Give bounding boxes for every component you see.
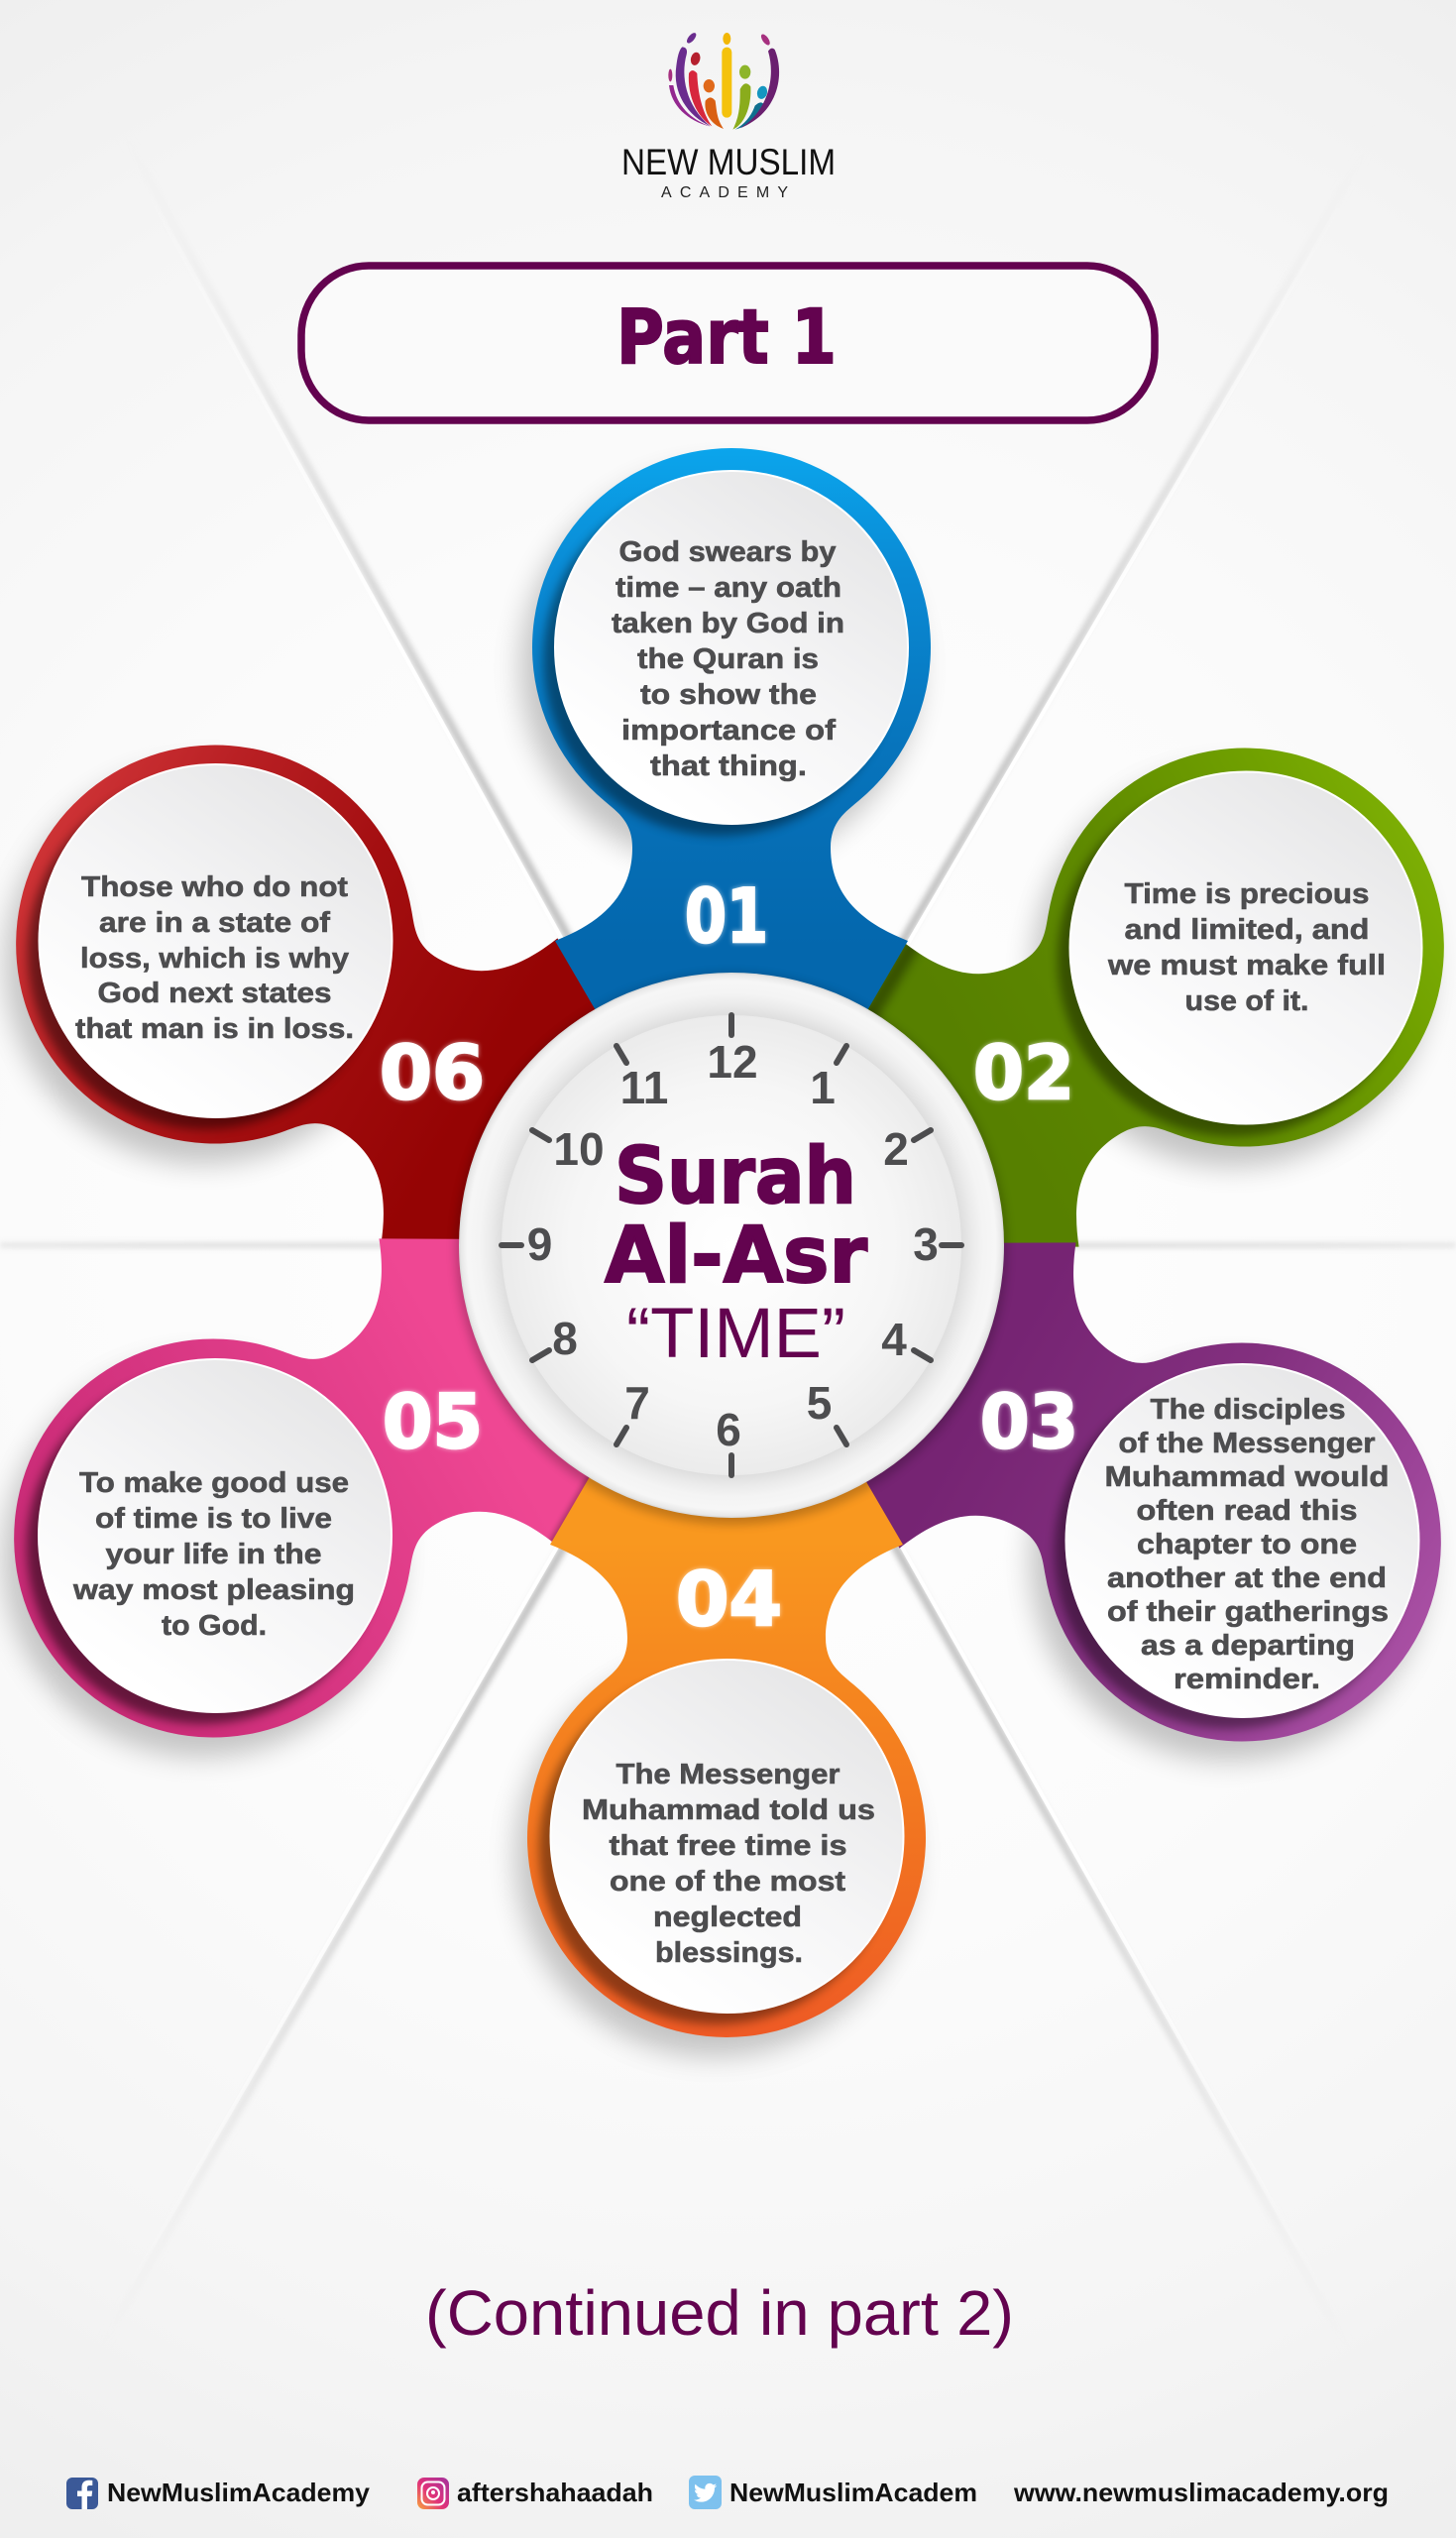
text 02: use of it. — [1185, 985, 1308, 1017]
text 02: Time is precious — [1124, 878, 1370, 910]
clock title: Al-Asr — [605, 1211, 868, 1301]
text 02: we must make full — [1107, 950, 1386, 981]
text 04: The Messenger — [616, 1759, 840, 1790]
icon: facebook — [66, 2478, 98, 2509]
text 03: Muhammad would — [1104, 1461, 1390, 1493]
clock numerals: 4 — [881, 1314, 907, 1365]
icon: twitter — [689, 2476, 722, 2509]
clock numerals: 10 — [553, 1123, 605, 1175]
number 05: 05 — [383, 1378, 483, 1465]
text 01: God swears by — [618, 536, 837, 568]
text 04: one of the most — [610, 1866, 845, 1898]
clock title: “TIME” — [626, 1295, 845, 1373]
text 06: loss, which is why — [80, 943, 349, 975]
number 02: 02 — [973, 1029, 1074, 1116]
text 01: importance of — [621, 715, 836, 747]
text 06: God next states — [97, 978, 331, 1009]
text 01: that thing. — [650, 750, 807, 782]
text 01 — [612, 536, 844, 782]
text 03: reminder. — [1174, 1664, 1320, 1695]
clock title — [605, 1132, 868, 1373]
clock ticks — [502, 1015, 961, 1475]
text 05 — [72, 1467, 355, 1642]
text 03: The disciples — [1150, 1394, 1346, 1426]
clock numerals — [527, 1036, 939, 1455]
text 06: that man is in loss. — [75, 1013, 354, 1045]
logo tagline: ACADEMY — [661, 184, 788, 201]
clock rim — [459, 973, 1004, 1518]
website: www.newmuslimacademy.org — [1013, 2478, 1389, 2507]
number 03: 03 — [980, 1378, 1078, 1465]
text 03 — [1104, 1394, 1390, 1695]
text 04 — [582, 1759, 875, 1969]
text 04: blessings. — [655, 1937, 803, 1969]
text 05: to God. — [162, 1610, 267, 1642]
text 05: your life in the — [105, 1539, 321, 1570]
title pill: Part 1 — [301, 266, 1155, 420]
text 03: often read this — [1136, 1495, 1358, 1527]
text 02: and limited, and — [1124, 914, 1370, 946]
text 06: are in a state of — [99, 907, 330, 939]
text 05: To make good use — [79, 1467, 349, 1499]
text 01: to show the — [640, 679, 817, 711]
logo wordmark: NEW MUSLIM — [621, 142, 836, 182]
text 05: way most pleasing — [72, 1574, 355, 1606]
text 01: time – any oath — [616, 572, 841, 604]
panel 01: blue arm — [532, 448, 931, 1009]
number 01: 01 — [685, 872, 768, 960]
clock face — [502, 1015, 961, 1475]
clock numerals: 1 — [810, 1062, 836, 1113]
logo: New Muslim Academy — [621, 32, 836, 201]
panel 03: purple arm — [866, 1242, 1441, 1741]
clock numerals: 9 — [527, 1218, 552, 1270]
number 06: 06 — [380, 1029, 485, 1116]
twitter handle: NewMuslimAcadem — [729, 2478, 977, 2507]
clock numerals: 11 — [620, 1062, 668, 1113]
clock numerals: 7 — [624, 1377, 650, 1429]
clock title: Surah — [615, 1132, 856, 1221]
title pill: Part 1: Part 1 — [616, 292, 837, 381]
continued note: (Continued in part 2) — [425, 2277, 1014, 2349]
icon: instagram — [417, 2478, 449, 2509]
logo mark — [668, 32, 779, 130]
clock numerals: 5 — [807, 1377, 832, 1429]
clock numerals: 12 — [707, 1036, 758, 1088]
text 06: Those who do not — [81, 871, 348, 903]
clock numerals: 3 — [913, 1218, 939, 1270]
panel 05: pink arm — [14, 1238, 589, 1737]
text 04: that free time is — [609, 1830, 846, 1862]
text 03: as a departing — [1141, 1630, 1355, 1662]
text 03: of the Messenger — [1118, 1428, 1376, 1459]
text 04: neglected — [653, 1902, 802, 1933]
text 01: taken by God in — [612, 608, 844, 639]
clock — [456, 973, 1007, 1525]
facebook handle: NewMuslimAcademy — [107, 2478, 371, 2507]
text 02 — [1107, 878, 1386, 1017]
text 01: the Quran is — [637, 643, 819, 675]
panel 04: orange arm — [527, 1477, 926, 2037]
panel 02: green arm — [868, 748, 1444, 1247]
instagram handle: aftershahaadah — [457, 2478, 653, 2507]
text 03: another at the end — [1107, 1562, 1387, 1594]
text 03: of their gatherings — [1107, 1596, 1389, 1628]
footer social links — [66, 2476, 1389, 2509]
text 05: of time is to live — [95, 1503, 332, 1535]
number 04: 04 — [676, 1556, 782, 1643]
text 06 — [75, 871, 354, 1045]
clock numerals: 8 — [552, 1313, 578, 1364]
text 03: chapter to one — [1137, 1529, 1357, 1560]
soft shadows under the circles — [3, 469, 1431, 2056]
clock numerals: 6 — [716, 1404, 741, 1455]
text 04: Muhammad told us — [582, 1794, 875, 1826]
panel 06: red arm — [16, 746, 595, 1239]
clock numerals: 2 — [883, 1123, 909, 1175]
